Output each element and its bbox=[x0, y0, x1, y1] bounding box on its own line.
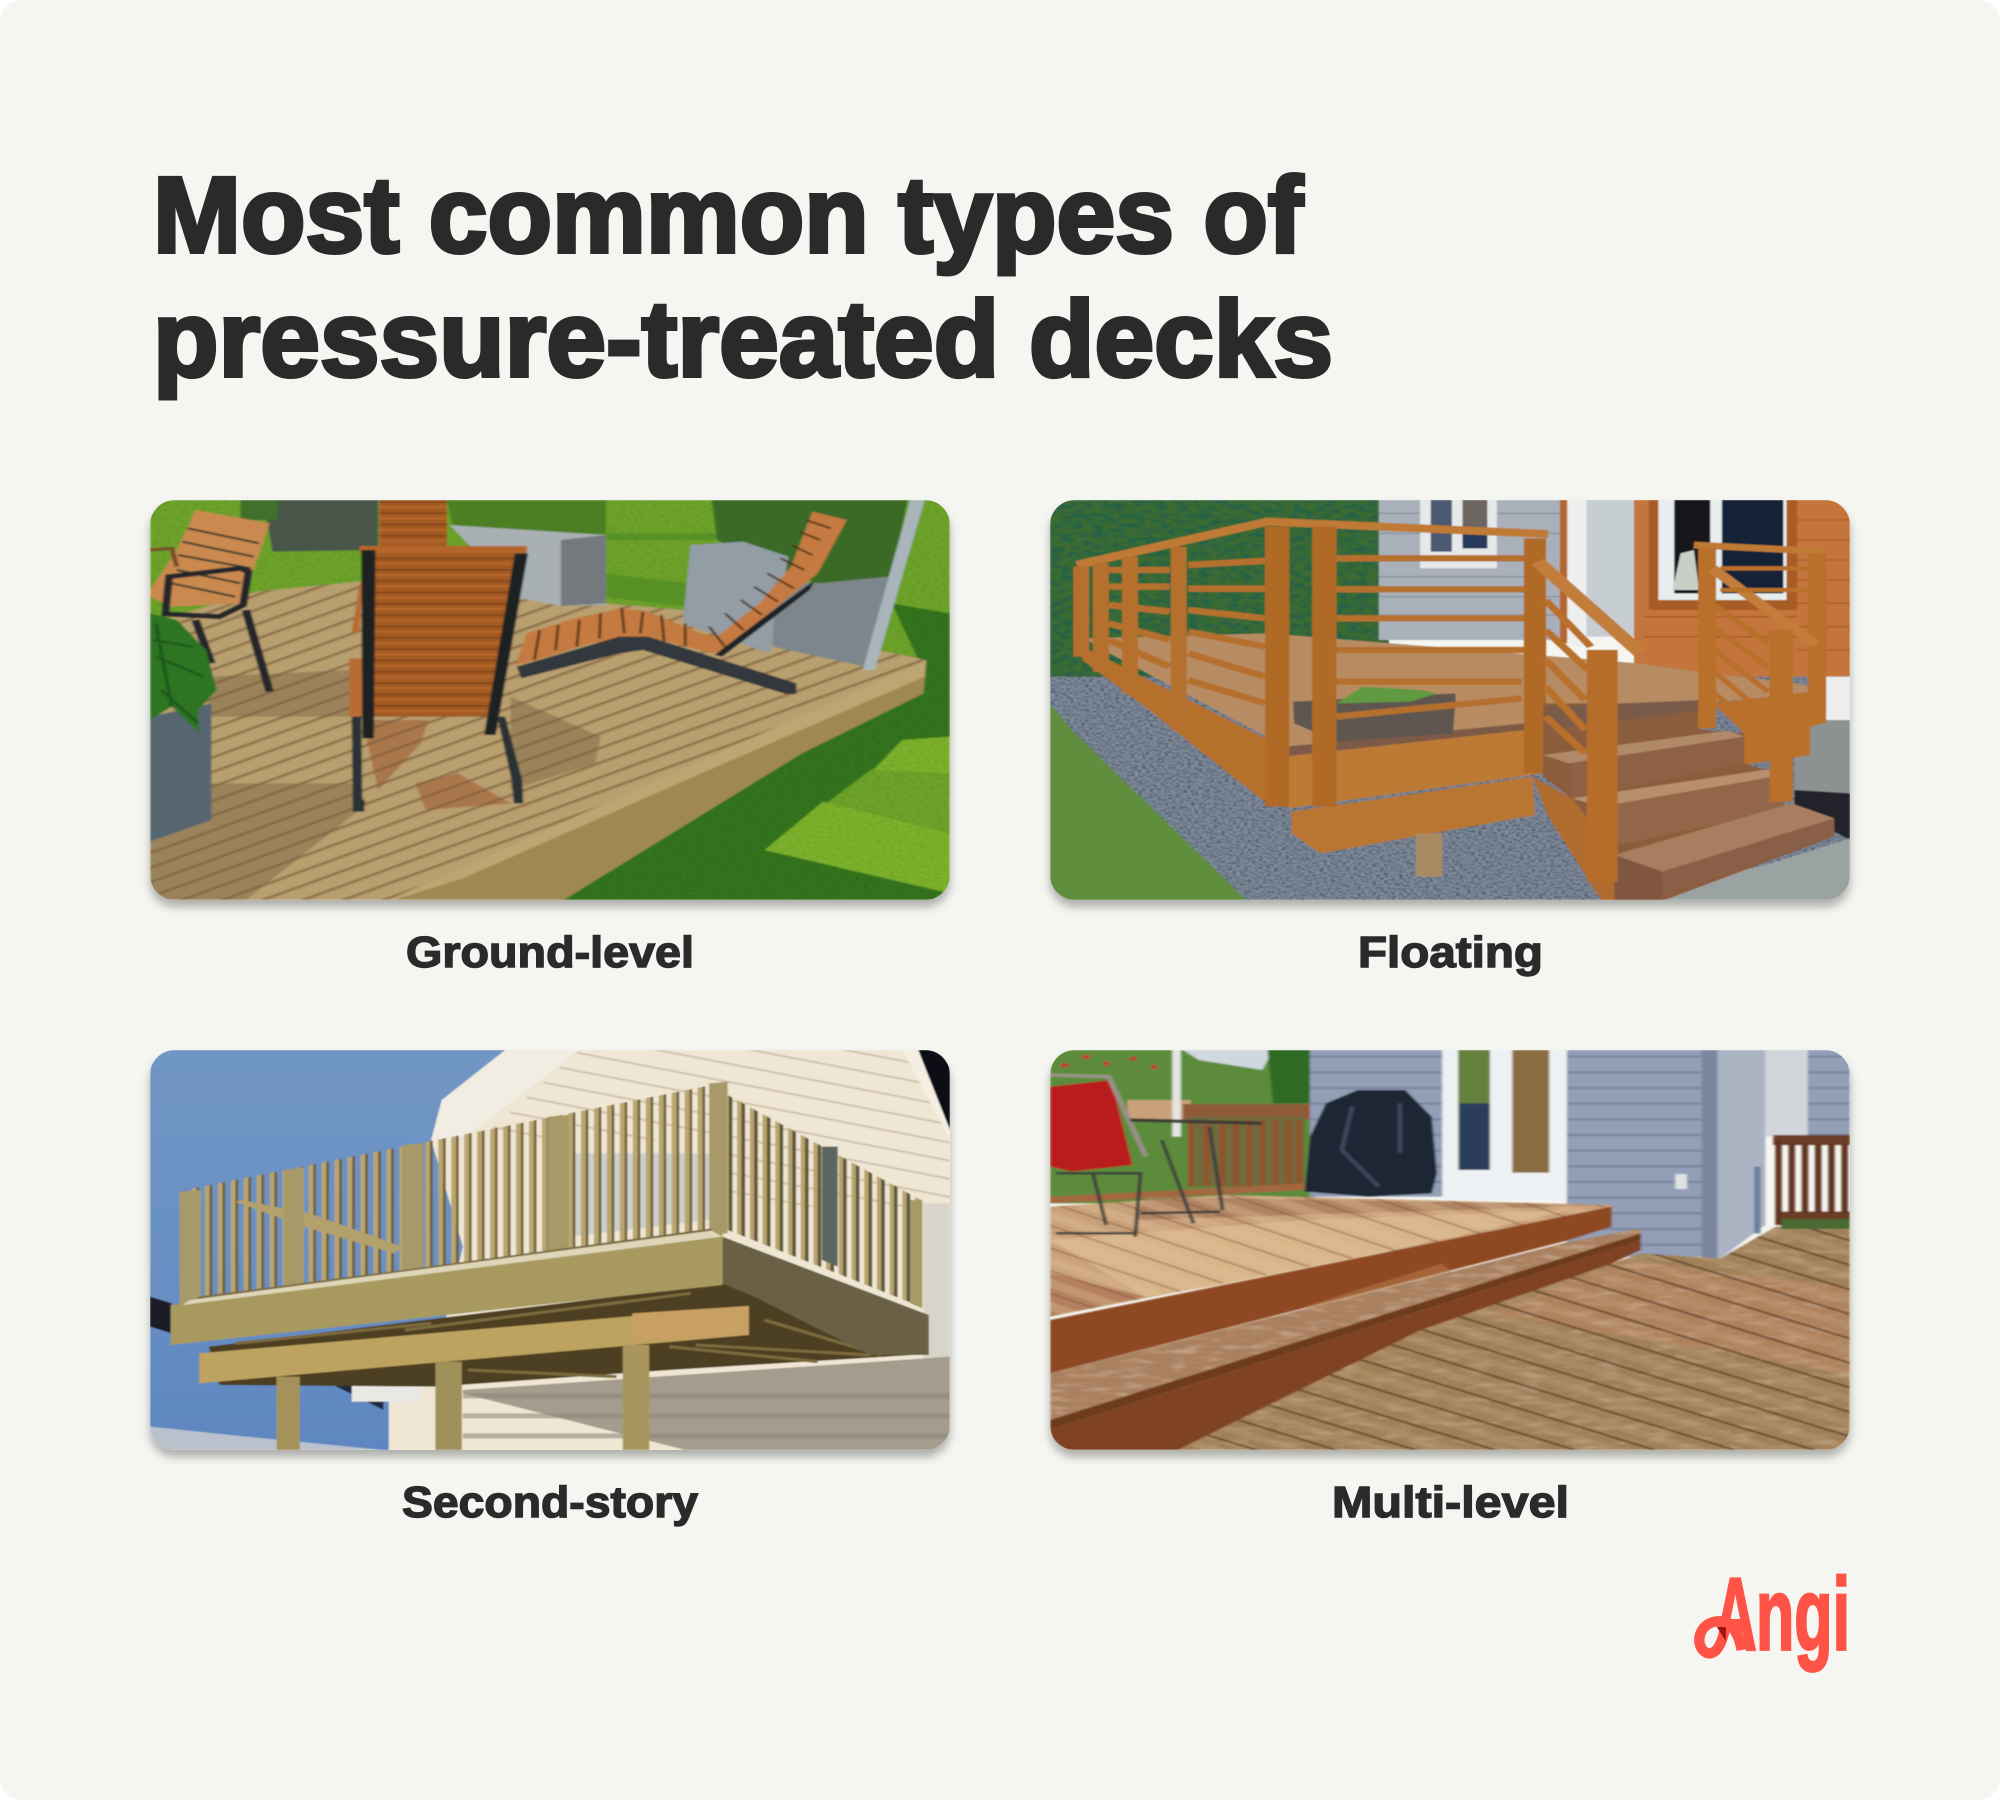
back railing bbox=[1050, 1104, 1321, 1203]
deck rim and beam bbox=[1082, 647, 1824, 877]
siding wall bbox=[1310, 1050, 1850, 1260]
upper deck bbox=[1050, 1195, 1613, 1317]
panel: multi-level deck photo bbox=[1050, 1050, 1850, 1450]
french doors bbox=[1442, 1050, 1567, 1200]
panel: floating deck photo bbox=[1050, 500, 1850, 900]
title: Most common types of bbox=[153, 154, 1304, 275]
stairs bbox=[1532, 700, 1834, 900]
right railing bbox=[1773, 1135, 1850, 1229]
door bbox=[1560, 500, 1635, 647]
upper front beam bbox=[171, 1231, 722, 1345]
distant roof bits bbox=[150, 1297, 421, 1450]
support posts bbox=[277, 1345, 649, 1450]
grass bbox=[1050, 703, 1246, 900]
railing bbox=[1077, 522, 1548, 807]
balusters front bbox=[180, 1082, 728, 1305]
panel: second-story deck photo bbox=[150, 1050, 950, 1450]
joists underneath bbox=[209, 1283, 929, 1387]
foundation and concrete bbox=[1665, 677, 1850, 900]
deck side edge bbox=[389, 660, 926, 900]
upper step riser bbox=[1050, 1207, 1612, 1373]
balusters side bbox=[728, 1095, 922, 1308]
label: floating: Floating bbox=[1358, 928, 1543, 977]
red folding chair and table bbox=[1050, 1075, 1262, 1237]
grill with cover bbox=[1305, 1090, 1437, 1197]
title bbox=[153, 154, 1333, 400]
left bench bbox=[150, 510, 270, 692]
label: ground-level: Ground-level bbox=[406, 928, 694, 977]
deck surface with boards bbox=[150, 582, 926, 900]
lawn bbox=[150, 500, 950, 900]
lower step tread bbox=[1050, 1228, 1641, 1430]
title: pressure-treated decks bbox=[153, 278, 1333, 399]
lower step riser bbox=[1050, 1240, 1641, 1450]
side rim beam bbox=[722, 1237, 929, 1355]
panel: ground-level deck photo bbox=[150, 500, 950, 900]
lounger bbox=[516, 512, 847, 694]
sky bbox=[150, 1050, 950, 1450]
trees bbox=[1050, 500, 1389, 677]
garden background bbox=[1050, 1050, 1315, 1203]
fern and left planter bbox=[150, 613, 217, 842]
label: multi-level: Multi-level bbox=[1332, 1478, 1569, 1527]
orange siding and right window bbox=[1634, 500, 1850, 677]
shrubs and planters bbox=[241, 500, 925, 670]
deck surface bbox=[1085, 633, 1808, 748]
logo: Angi bbox=[1694, 1560, 1850, 1673]
lower deck bbox=[1178, 1227, 1850, 1450]
grey siding house and window bbox=[1379, 500, 1569, 640]
back chair and middle chair bbox=[349, 500, 528, 812]
lower beam bbox=[199, 1306, 749, 1383]
house wall bbox=[389, 1050, 950, 1450]
planter on deck bbox=[1293, 687, 1456, 742]
stair railings bbox=[1538, 545, 1829, 882]
gravel ground bbox=[1050, 670, 1850, 900]
label: second-story: Second-story bbox=[402, 1478, 699, 1527]
